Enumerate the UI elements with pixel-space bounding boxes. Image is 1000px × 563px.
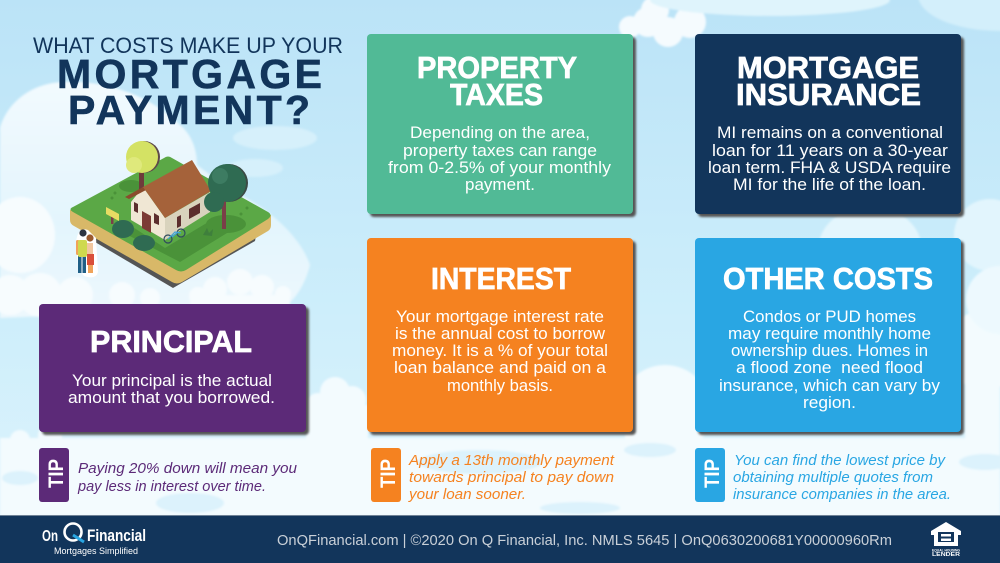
tip: principal: pay less in interest over time.	[77, 478, 266, 495]
tip: other costs: TIP	[701, 459, 724, 488]
title: PAYMENT?	[68, 87, 310, 133]
platform shadow	[95, 226, 258, 288]
other costs text: Condos or PUD homes	[743, 308, 916, 326]
logo: On Q Financial	[42, 524, 146, 556]
title: MORTGAGE	[57, 51, 322, 97]
other costs heading: OTHER COSTS	[723, 261, 933, 296]
couple	[76, 229, 98, 277]
property taxes heading	[417, 50, 577, 112]
panel: other costs	[695, 238, 964, 435]
decor on lawn	[110, 192, 248, 238]
interest text	[392, 308, 608, 395]
other costs text: insurance, which can vary by	[719, 377, 941, 395]
mortgage insurance text: loan for 11 years on a 30-year	[712, 142, 949, 160]
icon: equal housing lender	[931, 522, 961, 558]
logo: On Q Financial: Financial	[87, 526, 146, 545]
principal heading: PRINCIPAL	[90, 324, 252, 359]
property taxes heading: TAXES	[450, 77, 543, 112]
other costs text: region.	[803, 394, 856, 412]
tip: principal	[39, 448, 298, 502]
sign	[106, 207, 119, 224]
footer bar	[0, 515, 1000, 563]
principal text	[68, 372, 275, 407]
logo: On Q Financial: Mortgages Simplified	[54, 546, 138, 556]
tip: interest	[371, 448, 615, 503]
bushes	[112, 220, 134, 238]
mortgage insurance text: MI remains on a conventional	[717, 124, 943, 142]
tip: other costs	[695, 448, 951, 503]
principal text: Your principal is the actual	[72, 372, 272, 390]
mortgage insurance heading: INSURANCE	[736, 77, 921, 112]
property taxes text: property taxes can range	[403, 142, 597, 160]
property taxes text: Depending on the area,	[410, 124, 590, 142]
panel: mortgage insurance	[695, 34, 964, 217]
mortgage insurance text: loan term. FHA & USDA require	[708, 159, 951, 177]
principal text: amount that you borrowed.	[68, 389, 275, 407]
tip: other costs: obtaining multiple quotes from	[733, 469, 933, 486]
mortgage insurance text: MI for the life of the loan.	[733, 176, 926, 194]
property taxes text: payment.	[465, 176, 535, 194]
illustration: house on isometric lawn with couple	[70, 141, 271, 288]
tip: other costs: You can find the lowest price by	[734, 452, 946, 469]
bicycle	[164, 229, 185, 243]
interest text: monthly basis.	[447, 377, 553, 395]
other costs text: a flood zone need flood	[736, 359, 923, 377]
tip: other costs: insurance companies in the area.	[733, 486, 951, 503]
icon: equal housing lender: EQUAL HOUSING	[932, 548, 960, 552]
logo: On Q Financial: On	[42, 528, 58, 545]
mortgage insurance text	[708, 124, 951, 194]
mortgage insurance heading: MORTGAGE	[737, 50, 919, 85]
property taxes heading: PROPERTY	[417, 50, 577, 85]
other costs text: ownership dues. Homes in	[731, 342, 928, 360]
tip: interest: towards principal to pay down	[409, 469, 614, 486]
title: WHAT COSTS MAKE UP YOUR	[33, 33, 343, 58]
icon: equal housing lender: LENDER	[932, 552, 961, 558]
interest text: Your mortgage interest rate	[396, 308, 604, 326]
platform side	[70, 210, 271, 284]
tip: interest: Apply a 13th monthly payment	[408, 452, 615, 469]
panel: principal	[39, 304, 309, 435]
yellow tree	[119, 141, 160, 192]
interest heading: INTEREST	[431, 261, 571, 296]
panel: property taxes	[367, 34, 636, 217]
mortgage insurance heading	[736, 50, 921, 112]
other costs text	[719, 308, 941, 412]
house	[125, 160, 211, 240]
tip: interest: your loan sooner.	[408, 486, 526, 503]
house shadow on lawn	[122, 218, 240, 262]
footer text: OnQFinancial.com | ©2020 On Q Financial, Inc. NMLS 5645 | OnQ0630200681Y00000960Rm	[277, 533, 892, 549]
property taxes text	[388, 124, 612, 194]
platform lawn	[70, 156, 270, 272]
tip: principal: TIP	[45, 459, 68, 488]
dark green tree	[204, 164, 248, 233]
interest text: money. It is a % of your total	[392, 342, 608, 360]
interest text: is the annual cost to borrow	[395, 325, 605, 343]
panel: interest	[367, 238, 636, 435]
property taxes text: from 0-2.5% of your monthly	[388, 159, 612, 177]
interest text: loan balance and paid on a	[394, 359, 607, 377]
other costs text: may require monthly home	[728, 325, 931, 343]
tip: principal: Paying 20% down will mean you	[78, 460, 298, 477]
title	[33, 33, 343, 133]
tip: interest: TIP	[377, 459, 400, 488]
